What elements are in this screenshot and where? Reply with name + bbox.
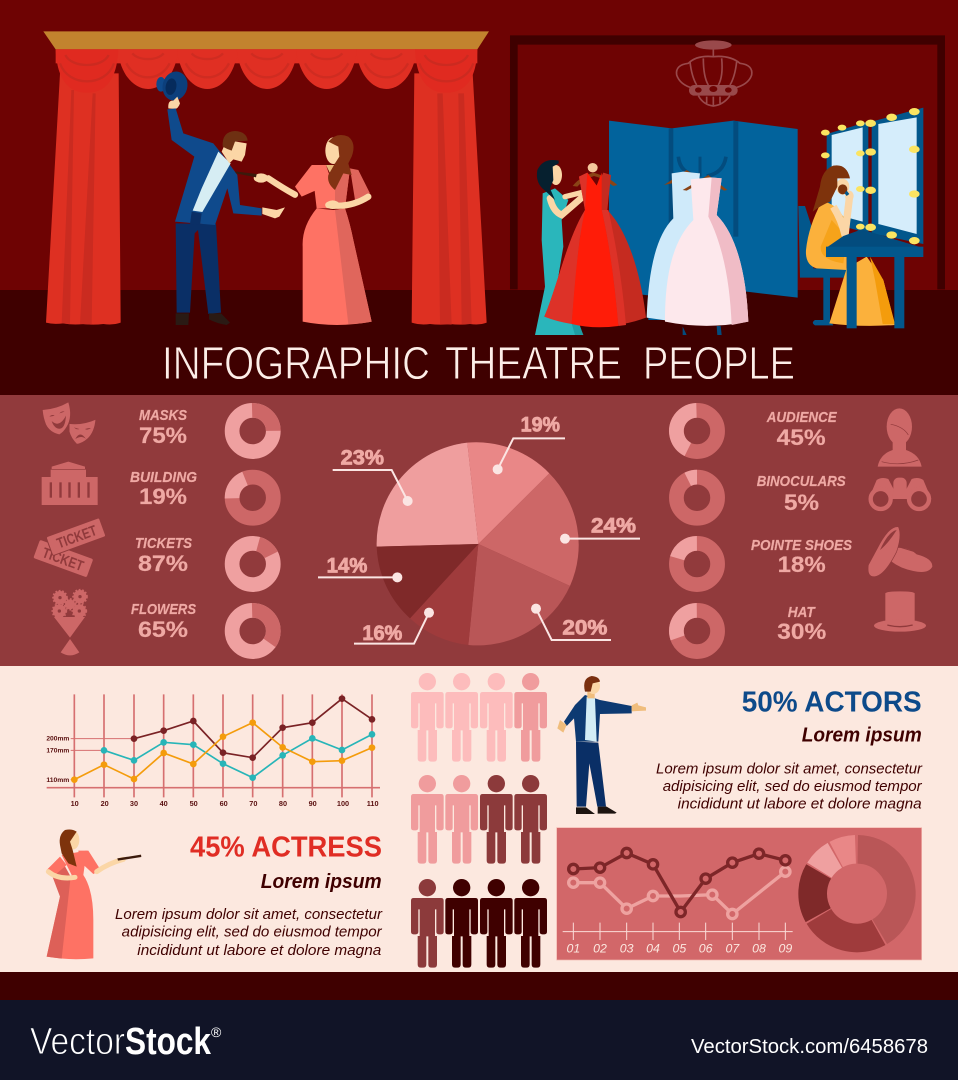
mirror bulbs <box>821 108 920 244</box>
scene: stage with curtains and actors <box>43 31 489 325</box>
body text: incididunt ut labore et dolore magna <box>678 795 922 812</box>
axis labels: 60 <box>220 799 228 808</box>
axis labels <box>46 737 379 808</box>
actress with wand <box>235 135 372 325</box>
series: teal <box>101 731 375 781</box>
makeup mirror with bulbs <box>827 108 923 244</box>
right column labels: AUDIENCE <box>766 409 838 426</box>
right column labels: HAT <box>788 604 816 621</box>
footer logo <box>30 1021 222 1063</box>
left column labels: 87% <box>138 551 188 576</box>
icon: tickets: TICKET <box>40 545 86 575</box>
title: INFOGRAPHIC <box>162 337 430 389</box>
pie leader dots <box>392 464 570 618</box>
axis labels: 80 <box>279 799 287 808</box>
right column labels: 18% <box>778 552 826 577</box>
dressing table <box>826 229 923 328</box>
icon: pointe shoes <box>868 527 932 577</box>
red gown on hanger <box>544 163 646 327</box>
body text <box>115 906 383 959</box>
chair <box>798 206 847 325</box>
actress text block <box>115 832 383 959</box>
central pie chart <box>318 414 640 645</box>
pie percentage labels: 24% <box>591 515 636 538</box>
axis labels: 20 <box>101 799 109 808</box>
right column labels: 45% <box>777 425 826 450</box>
woman at mirror <box>806 165 895 326</box>
pictogram people grid <box>411 673 547 968</box>
pie percentage labels <box>327 414 636 645</box>
heading: 50% actors: 50% ACTORS <box>742 687 922 719</box>
folding screen <box>609 121 798 320</box>
band: dark strip <box>0 972 958 1000</box>
axis labels 01-09: 03 <box>620 941 634 955</box>
pie percentage labels: 23% <box>341 446 384 469</box>
axis labels 01-09: 04 <box>646 941 660 955</box>
title: THEATRE <box>445 337 622 389</box>
icon: audience woman bust <box>878 408 922 467</box>
subheading: Lorem ipsum <box>802 725 922 747</box>
icon: theatre masks <box>43 402 96 444</box>
right column labels: BINOCULARS <box>757 473 846 490</box>
series: dark red <box>131 695 375 761</box>
left column labels <box>130 407 197 642</box>
left column labels: 75% <box>139 423 187 448</box>
pie percentage labels: 14% <box>327 554 368 577</box>
axis labels 01-09: 05 <box>672 941 686 955</box>
line chart <box>46 694 380 808</box>
panel: cream lower section <box>0 666 958 972</box>
series: light <box>569 867 790 919</box>
donut chart <box>796 833 918 955</box>
body text: adipisicing elit, sed do eiusmod tempor <box>122 924 383 941</box>
axis with ticks <box>563 923 793 940</box>
right curtain <box>412 73 487 325</box>
axis labels: 30 <box>130 799 138 808</box>
footer url: VectorStock.com/6458678 <box>691 1036 928 1058</box>
axis labels: 50 <box>190 799 198 808</box>
right column labels: 5% <box>784 490 819 515</box>
pie percentage labels: 20% <box>562 616 608 639</box>
axis labels: 40 <box>160 799 168 808</box>
footer logo: ® <box>211 1024 222 1040</box>
left column labels: TICKETS <box>135 535 192 552</box>
actors text block <box>656 687 923 812</box>
valance swags <box>56 49 477 93</box>
body text: Lorem ipsum dolor sit amet, consectetur <box>115 906 383 923</box>
body text <box>656 760 923 812</box>
footer logo: Stock <box>125 1021 212 1063</box>
left column labels: 65% <box>138 617 188 642</box>
icon: binoculars <box>869 478 931 509</box>
icon: top hat <box>874 591 926 632</box>
axis labels 01-09: 09 <box>778 941 792 955</box>
figure: actor presenting <box>557 676 646 814</box>
body text: adipisicing elit, sed do eiusmod tempor <box>663 778 923 795</box>
axis labels: 10 <box>71 799 79 808</box>
right column labels: 30% <box>777 619 826 644</box>
right column labels: POINTE SHOES <box>751 537 852 554</box>
left curtain <box>46 73 121 325</box>
panel: chart card <box>557 828 922 960</box>
dressmaker in teal <box>535 160 587 335</box>
icon: tickets <box>33 518 106 577</box>
axis labels: 90 <box>309 799 317 808</box>
title <box>162 337 795 389</box>
axis labels 01-09 <box>566 941 792 955</box>
axis labels 01-09: 07 <box>725 941 740 955</box>
axis labels 01-09: 06 <box>699 941 713 955</box>
axis labels: 170mm <box>46 749 69 755</box>
chandelier <box>676 40 752 106</box>
back room frame <box>510 35 945 289</box>
left column donuts <box>227 410 278 652</box>
right column donuts <box>669 403 725 657</box>
right column labels <box>751 409 852 644</box>
left column labels: 19% <box>139 484 187 509</box>
footer logo: Vector <box>30 1021 125 1063</box>
body text: Lorem ipsum dolor sit amet, consectetur <box>656 760 923 777</box>
pie percentage labels: 16% <box>362 622 403 645</box>
icon: flower bouquet <box>53 590 87 655</box>
left column labels: BUILDING <box>130 469 197 486</box>
series: orange <box>71 719 375 783</box>
background: upper wall <box>0 0 958 290</box>
panel: statistics band <box>0 395 958 666</box>
left column labels: FLOWERS <box>131 601 196 618</box>
icon: tickets: TICKET <box>55 523 99 552</box>
actor bowing with hat <box>156 69 285 325</box>
scene: dressing room <box>510 35 945 335</box>
title: PEOPLE <box>643 337 795 389</box>
left column labels: MASKS <box>139 407 187 424</box>
axis labels 01-09: 08 <box>752 941 766 955</box>
axis labels 01-09: 02 <box>593 941 607 955</box>
icon: theatre building <box>42 462 98 505</box>
body text: incididunt ut labore et dolore magna <box>137 942 381 959</box>
axis labels: 70 <box>249 799 257 808</box>
series: dark <box>569 848 790 917</box>
axis labels: 110mm <box>46 778 69 784</box>
axis labels: 200mm <box>46 737 69 743</box>
axis labels 01-09: 01 <box>566 941 580 955</box>
figure: actress pointing <box>47 829 141 959</box>
cornice <box>43 31 489 49</box>
pie leader lines <box>318 438 640 644</box>
subheading: Lorem ipsum <box>261 871 382 893</box>
pie percentage labels: 19% <box>521 414 560 437</box>
footer bar <box>0 1000 958 1080</box>
heading: 45% actress: 45% ACTRESS <box>190 832 382 864</box>
white dresses on stand <box>647 157 748 335</box>
axis labels: 100 <box>337 799 349 808</box>
background: stage floor <box>0 290 958 395</box>
axis labels: 110 <box>367 799 379 808</box>
